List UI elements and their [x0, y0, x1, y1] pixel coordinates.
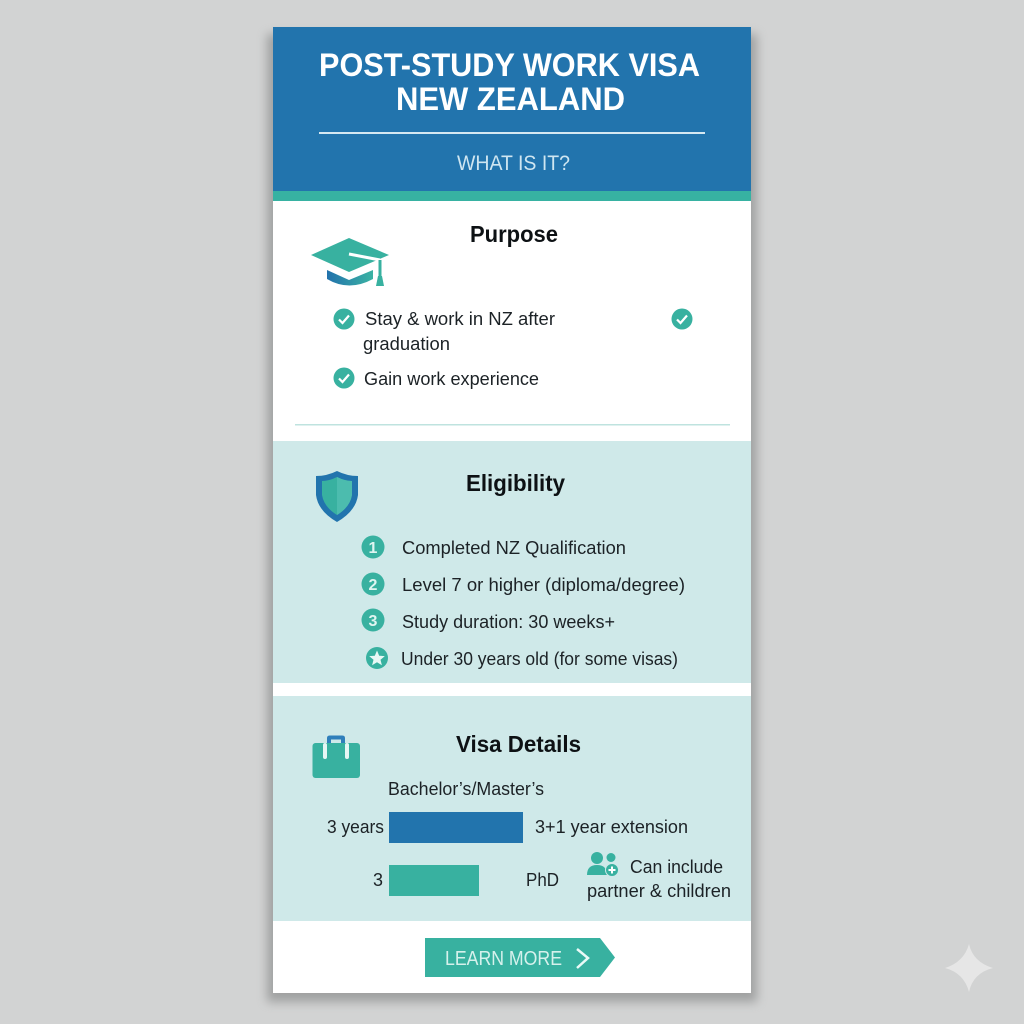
icon: family [587, 852, 619, 876]
icon: check [334, 308, 354, 330]
badge star [366, 647, 388, 669]
icon: sparkle watermark [945, 944, 993, 992]
heading: visa details: Visa Details [456, 731, 581, 757]
title: NEW ZEALAND [396, 81, 625, 117]
text: family note: Can include [630, 857, 723, 877]
list: purpose points [334, 308, 692, 389]
icon: check right [672, 308, 692, 330]
badge 3: 3 [369, 613, 378, 630]
text: family note: partner & children [587, 881, 731, 901]
badge 2 [362, 572, 384, 596]
list: eligibility criteria [362, 536, 685, 669]
title: POST-STUDY WORK VISA [319, 47, 700, 83]
panel: eligibility [273, 441, 751, 683]
label: PhD: PhD [526, 870, 559, 890]
badge 1: 1 [369, 540, 378, 557]
icon: chevron [577, 949, 588, 968]
badge 1 [362, 536, 384, 558]
title [319, 47, 700, 117]
bar: bachelor's and master's [389, 812, 523, 843]
text: criterion 3: Study duration: 30 weeks+ [402, 612, 615, 632]
text: family note [587, 857, 731, 901]
subtitle: WHAT IS IT? [457, 152, 570, 175]
icon: check [334, 368, 354, 388]
text: criterion 1: Completed NZ Qualification [402, 538, 626, 558]
bar: PhD [389, 865, 479, 896]
heading: purpose: Purpose [470, 221, 558, 247]
panel: purpose [295, 221, 730, 426]
label: bachelor's and master's: Bachelor’s/Master’s [388, 779, 544, 799]
button: learn more [425, 938, 615, 977]
label: extension: 3+1 year extension [535, 817, 688, 837]
panel: visa details [273, 696, 751, 921]
badge 2: 2 [369, 577, 378, 594]
bar chart: visa durations [327, 779, 688, 896]
icon: graduation cap [311, 238, 389, 286]
text: stay and work: Stay & work in NZ after [365, 309, 555, 329]
header banner [273, 27, 751, 201]
icon: briefcase [312, 736, 360, 778]
badge 3 [362, 608, 384, 632]
text: stay and work [363, 309, 555, 354]
icon: shield [316, 471, 358, 522]
infographic card [273, 27, 751, 993]
text: work experience: Gain work experience [364, 369, 539, 389]
button: learn more: LEARN MORE [445, 948, 562, 970]
heading: eligibility: Eligibility [466, 470, 565, 496]
text: criterion 4: Under 30 years old (for some visas) [401, 649, 678, 669]
label: 3: 3 [373, 870, 383, 890]
label: 3 years: 3 years [327, 817, 384, 837]
text: stay and work: graduation [363, 334, 450, 354]
text: criterion 2: Level 7 or higher (diploma/degree) [402, 575, 685, 595]
